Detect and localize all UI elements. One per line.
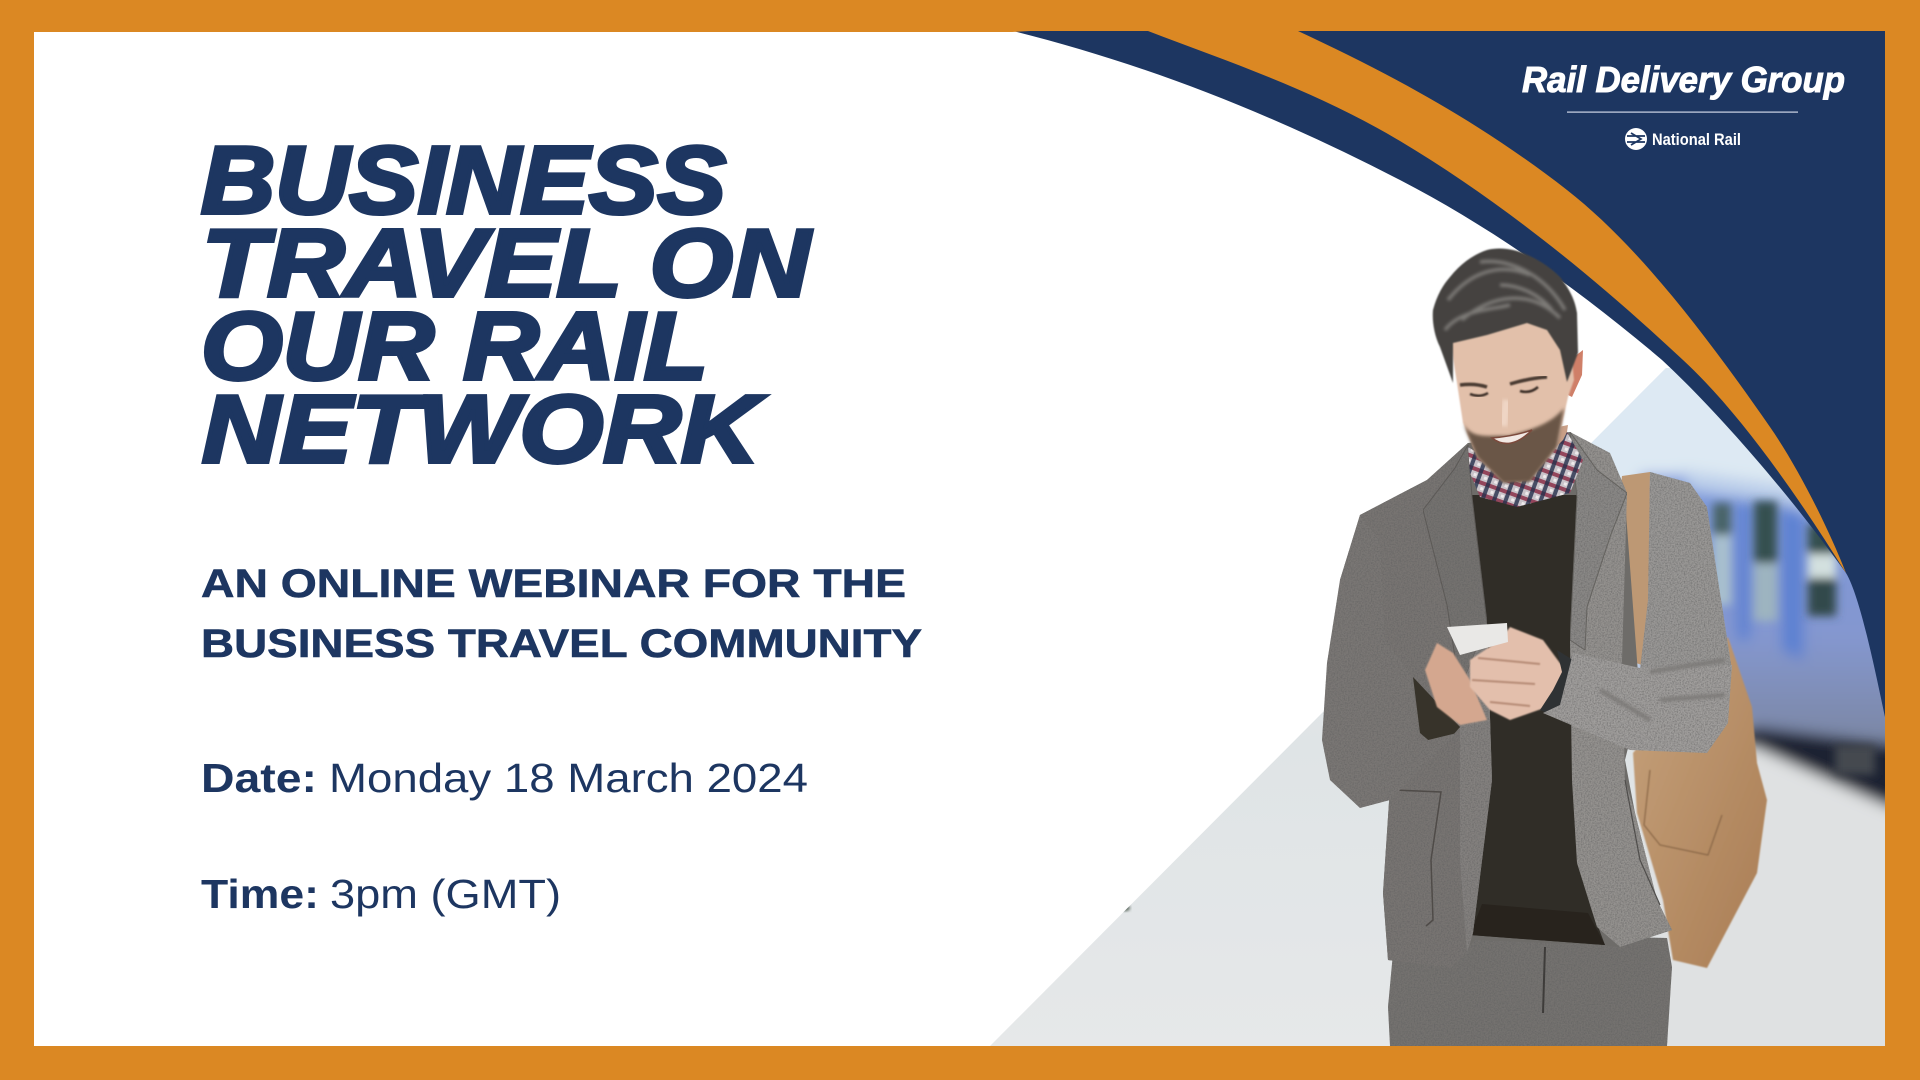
plaid collar bbox=[1468, 432, 1583, 507]
left hand bbox=[1425, 643, 1487, 725]
upper right arm bbox=[1640, 472, 1732, 670]
title line 4: NETWORK bbox=[202, 376, 766, 483]
left lapel bbox=[1423, 445, 1487, 690]
subtitle bbox=[201, 562, 922, 666]
right hem stitch bbox=[1625, 780, 1660, 905]
phone bbox=[1447, 623, 1508, 655]
sweater hem bbox=[1470, 904, 1605, 945]
subtitle line 2: BUSINESS TRAVEL COMMUNITY bbox=[201, 622, 922, 666]
jacket left panel bbox=[1340, 443, 1492, 968]
title line 2: TRAVEL ON bbox=[202, 210, 812, 317]
train and sky, blurred bbox=[1592, 368, 1885, 818]
icon: National Rail roundel bbox=[1625, 128, 1647, 150]
jacket base layer bbox=[1360, 432, 1672, 968]
trouser crease bbox=[1543, 947, 1545, 1013]
platform mark bbox=[1120, 905, 1130, 911]
title bbox=[201, 127, 812, 483]
National Rail wordmark: National Rail bbox=[1652, 131, 1741, 149]
sleeve wrinkles bbox=[1600, 660, 1725, 720]
orange swoosh bbox=[1148, 31, 1846, 573]
shoulder strap bbox=[1622, 472, 1650, 664]
time value: 3pm (GMT) bbox=[330, 871, 561, 917]
date line bbox=[201, 755, 808, 801]
train windows bbox=[1713, 501, 1875, 775]
face bbox=[1450, 318, 1574, 482]
right lapel bbox=[1570, 432, 1627, 650]
neck bbox=[1472, 425, 1568, 483]
logo wordmark: Rail Delivery Group bbox=[1522, 59, 1845, 100]
trousers bbox=[1388, 933, 1672, 1046]
time label: Time: bbox=[201, 871, 319, 917]
logo divider bbox=[1567, 112, 1798, 113]
logo: Rail Delivery Group bbox=[1522, 59, 1845, 150]
hair highlights bbox=[1445, 261, 1565, 330]
finger lines bbox=[1472, 658, 1540, 706]
jacket right panel bbox=[1570, 432, 1672, 947]
jacket pocket bbox=[1395, 790, 1441, 926]
date label: Date: bbox=[201, 755, 317, 801]
watch bbox=[1540, 650, 1572, 712]
bag pocket seam bbox=[1644, 770, 1722, 855]
right sleeve forearm bbox=[1543, 653, 1732, 753]
platform bbox=[990, 711, 1644, 1046]
dark sweater bbox=[1470, 495, 1605, 945]
nose highlight bbox=[1503, 400, 1507, 426]
photo background: station platform and train bbox=[990, 368, 1885, 1046]
navy corner curve bbox=[1013, 31, 1885, 717]
shoulder bag bbox=[1633, 637, 1767, 968]
title line 1: BUSINESS bbox=[201, 127, 726, 234]
ear bbox=[1568, 350, 1583, 397]
eyes and brows bbox=[1460, 377, 1547, 396]
time line bbox=[201, 871, 561, 917]
subtitle line 1: AN ONLINE WEBINAR FOR THE bbox=[201, 562, 906, 606]
mouth bbox=[1492, 430, 1532, 443]
hair bbox=[1433, 249, 1578, 383]
left front placket bbox=[1460, 623, 1492, 953]
photo: man walking and looking at phone bbox=[1322, 249, 1767, 1046]
title line 3: OUR RAIL bbox=[201, 293, 708, 400]
beard bbox=[1463, 408, 1564, 483]
left sleeve bbox=[1322, 515, 1457, 808]
right hand bbox=[1470, 627, 1565, 720]
date value: Monday 18 March 2024 bbox=[329, 755, 808, 801]
sweater left cuff bbox=[1413, 677, 1460, 750]
